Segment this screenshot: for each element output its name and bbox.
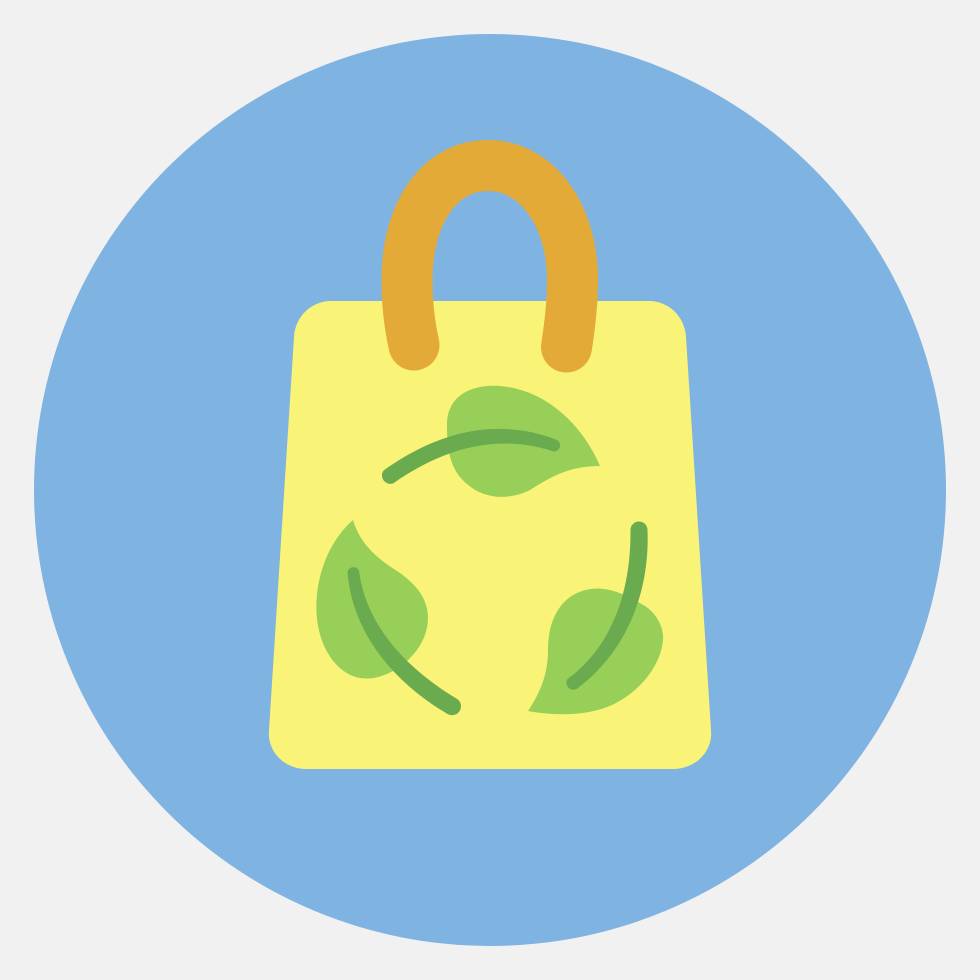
leaf stem bbox=[348, 567, 461, 715]
recycling leaves bbox=[316, 386, 663, 715]
leaf blade bbox=[447, 386, 600, 497]
bag handle bbox=[407, 166, 572, 347]
bag body bbox=[269, 301, 711, 769]
leaf stem bbox=[382, 429, 560, 484]
top leaf bbox=[382, 386, 600, 497]
leaf blade bbox=[316, 520, 428, 679]
left leaf bbox=[316, 520, 461, 715]
right leaf bbox=[528, 522, 663, 714]
leaf stem bbox=[566, 522, 648, 690]
leaf blade bbox=[528, 588, 663, 714]
